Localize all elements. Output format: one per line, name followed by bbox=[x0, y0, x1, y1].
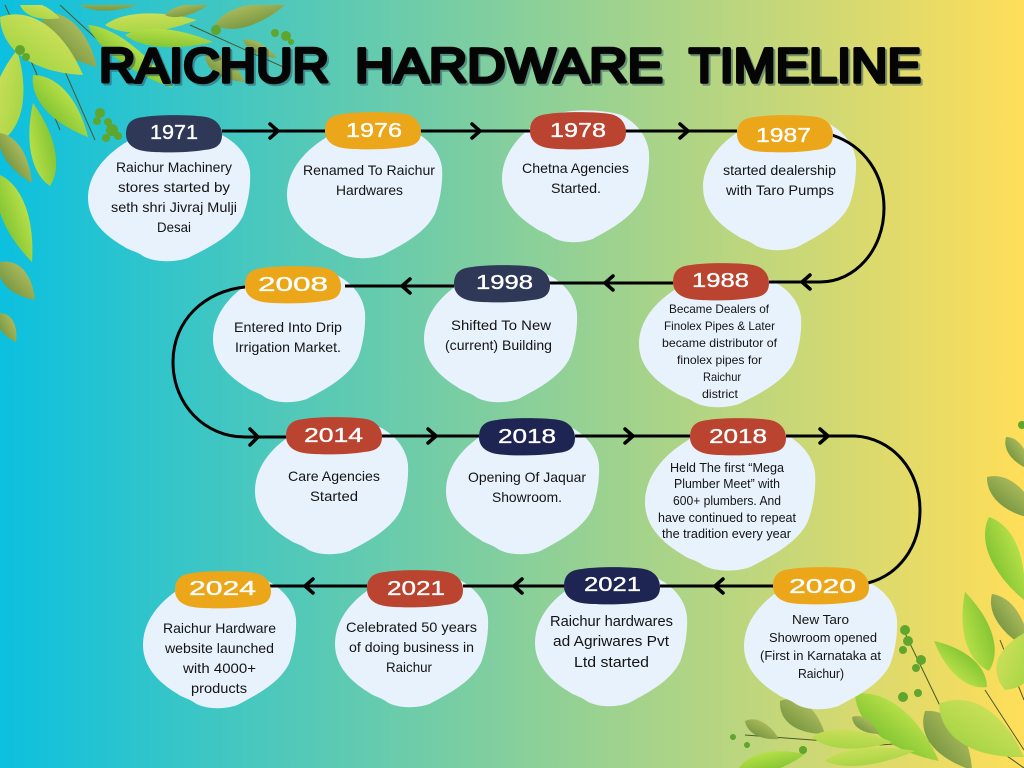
pill: 2020 bbox=[773, 567, 869, 604]
pill: 1978 bbox=[530, 112, 626, 149]
text: 2014 bbox=[288, 468, 380, 504]
text: 2008 bbox=[234, 319, 342, 355]
text: 2014: Care Agencies bbox=[288, 468, 380, 484]
text: 1998: Shifted To New bbox=[451, 317, 552, 333]
arrow: row two bbox=[402, 275, 810, 293]
pill: 1988 bbox=[673, 263, 769, 300]
text: 1976: Renamed To Raichur bbox=[303, 162, 435, 178]
blob: 2014 bbox=[255, 422, 408, 554]
pill: 1976: 1976 bbox=[346, 120, 402, 142]
pill: 2021 fifty years bbox=[367, 570, 463, 607]
blob: 1998 bbox=[424, 270, 577, 402]
text: 1978 bbox=[522, 160, 629, 196]
pill: 2021 agriwares: 2021 bbox=[584, 574, 641, 596]
text: 2018 showroom: Opening Of Jaquar bbox=[468, 469, 586, 485]
text: 2021 agriwares: Raichur hardwares bbox=[550, 613, 673, 630]
year pills bbox=[126, 112, 869, 608]
blob: 2008 bbox=[213, 270, 365, 402]
text: 2021 fifty years: of doing business in bbox=[349, 639, 474, 655]
pill: 2024 bbox=[175, 571, 271, 608]
text: 2021 fifty years bbox=[346, 619, 477, 675]
pill: 1971: 1971 bbox=[150, 122, 198, 144]
blob: 1987 bbox=[703, 118, 856, 250]
blob: 2021 agriwares bbox=[535, 574, 687, 706]
text: 2018 meet: Held The first “Mega bbox=[670, 461, 784, 475]
decoration: right and bottom-right leaves bbox=[730, 421, 1024, 768]
text: 1987 bbox=[723, 162, 836, 198]
blob: 1976 bbox=[287, 126, 442, 258]
blob: 1988 bbox=[639, 275, 801, 407]
text: 1988: Raichur bbox=[703, 370, 741, 384]
pill: 1987: 1987 bbox=[756, 125, 811, 147]
pill: 1987 bbox=[737, 115, 833, 152]
text: 2008: Irrigation Market. bbox=[235, 339, 341, 355]
text: 1988: Became Dealers of bbox=[669, 302, 770, 316]
text: 1971: Desai bbox=[157, 219, 191, 235]
pill: 2018 meet bbox=[690, 418, 786, 455]
arrow: row three bbox=[250, 429, 828, 445]
text: 2018 meet: have continued to repeat bbox=[658, 511, 797, 525]
text: 2024: products bbox=[191, 680, 247, 696]
blob: 2018 meet bbox=[645, 428, 815, 571]
text: 2024: website launched bbox=[164, 640, 274, 656]
pill: 2020: 2020 bbox=[789, 576, 856, 598]
text: 2020 bbox=[760, 612, 881, 681]
pill: 2021 agriwares bbox=[564, 567, 660, 604]
pill: 1998: 1998 bbox=[476, 272, 533, 294]
text: 2014: Started bbox=[310, 488, 358, 504]
blob: 1978 bbox=[502, 110, 649, 242]
pill: 1988: 1988 bbox=[692, 270, 749, 292]
blob: 2021 fifty years bbox=[335, 575, 488, 707]
blob: 2024 bbox=[143, 576, 296, 708]
text: 1971: stores started by bbox=[118, 179, 230, 195]
timeline description blobs bbox=[88, 110, 897, 709]
text: 2020: New Taro bbox=[792, 612, 849, 627]
text: 2008: Entered Into Drip bbox=[234, 319, 342, 335]
pill: 1971 bbox=[126, 115, 222, 152]
text: 2021 fifty years: Celebrated 50 years bbox=[346, 619, 477, 635]
text: 1998 bbox=[445, 317, 552, 353]
decoration: top-left leaves bbox=[0, 0, 294, 346]
text: 2018 meet: Plumber Meet” with bbox=[674, 477, 780, 491]
text: 2021 agriwares: Ltd started bbox=[574, 654, 649, 671]
text: 1987: with Taro Pumps bbox=[725, 182, 834, 198]
pill: 2008 bbox=[245, 266, 341, 303]
text: 1971: Raichur Machinery bbox=[116, 159, 232, 175]
timeline descriptions bbox=[111, 159, 881, 696]
pill: 2018 showroom: 2018 bbox=[498, 426, 556, 448]
pill: 2018 showroom bbox=[479, 418, 575, 455]
text: 2024: with 4000+ bbox=[182, 660, 256, 676]
text: 1971 bbox=[111, 159, 237, 235]
pill: 1976 bbox=[325, 112, 421, 149]
text: 2020: Raichur) bbox=[798, 666, 844, 681]
blob: 1971 bbox=[88, 129, 250, 261]
text: 1987: started dealership bbox=[723, 162, 836, 178]
pill: 1998 bbox=[454, 265, 550, 302]
text: 2018 showroom bbox=[468, 469, 586, 505]
pill: 2018 meet: 2018 bbox=[709, 426, 767, 448]
pill: 1978: 1978 bbox=[550, 120, 606, 142]
title bbox=[99, 40, 921, 93]
text: 2024: Raichur Hardware bbox=[163, 620, 276, 636]
text: 2021 fifty years: Raichur bbox=[386, 659, 432, 675]
title: TIMELINE bbox=[689, 40, 921, 93]
text: 1988 bbox=[662, 302, 778, 401]
title: HARDWARE bbox=[355, 40, 663, 93]
text: 1988: became distributor of bbox=[662, 336, 778, 350]
pill: 2021 fifty years: 2021 bbox=[387, 578, 445, 600]
serpentine timeline path with arrows bbox=[173, 124, 920, 593]
title: RAICHUR bbox=[99, 40, 329, 93]
blob: 2020 bbox=[744, 577, 897, 709]
text: 2024 bbox=[163, 620, 276, 696]
text: 1978: Started. bbox=[551, 180, 601, 196]
pill: 2014 bbox=[286, 417, 382, 454]
pill: 2008: 2008 bbox=[258, 274, 328, 296]
text: 2020: (First in Karnataka at bbox=[760, 648, 881, 663]
text: 1976: Hardwares bbox=[336, 182, 403, 198]
text: 1971: seth shri Jivraj Mulji bbox=[111, 199, 237, 215]
arrow: row one bbox=[270, 124, 688, 138]
text: 2021 agriwares bbox=[550, 613, 673, 671]
text: 2018 meet: the tradition every year bbox=[662, 527, 791, 541]
arrow: row four bbox=[305, 579, 723, 593]
text: 2018 meet: 600+ plumbers. And bbox=[673, 494, 781, 508]
text: 2021 agriwares: ad Agriwares Pvt bbox=[553, 633, 670, 650]
text: 1976 bbox=[303, 162, 435, 198]
text: 1988: finolex pipes for bbox=[677, 353, 762, 367]
blob: 2018 showroom bbox=[446, 422, 599, 554]
text: 2018 meet bbox=[658, 461, 797, 541]
pill: 2014: 2014 bbox=[304, 425, 363, 447]
text: 1988: Finolex Pipes & Later bbox=[664, 319, 775, 333]
text: 2018 showroom: Showroom. bbox=[492, 489, 562, 505]
text: 1978: Chetna Agencies bbox=[522, 160, 629, 176]
text: 1998: (current) Building bbox=[445, 337, 552, 353]
text: 2020: Showroom opened bbox=[769, 630, 877, 645]
pill: 2024: 2024 bbox=[189, 578, 256, 600]
text: 1988: district bbox=[702, 387, 739, 401]
